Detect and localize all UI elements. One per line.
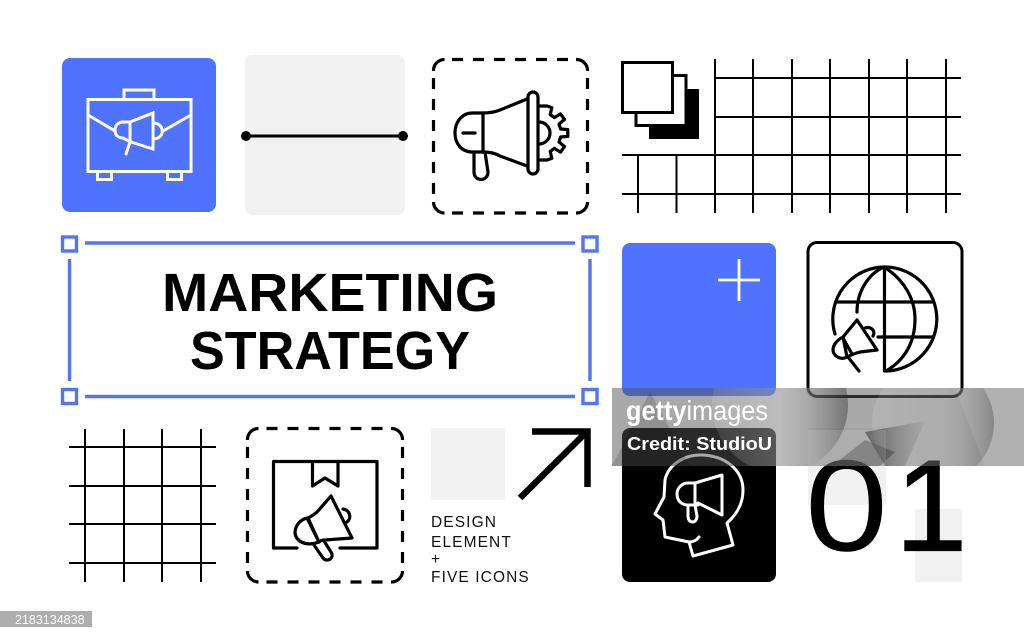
watermark band: gettyimages (626, 395, 768, 426)
gray panel with connector line (241, 55, 408, 215)
number 01 with gray swatches: 0 (805, 432, 888, 578)
caption (431, 514, 530, 586)
image id tag: 2183134838 (15, 613, 85, 627)
title frame with corner handles (62, 237, 597, 404)
number 01 with gray swatches (805, 428, 967, 582)
gray square swatch (431, 428, 505, 500)
arrow pointing up right (520, 432, 588, 498)
dashed tile: box with megaphone (247, 428, 403, 582)
caption: ELEMENT (431, 534, 512, 551)
dashed tile: megaphone with gear icon (433, 59, 588, 213)
outlined tile: globe with megaphone (808, 242, 962, 396)
watermark band (612, 388, 1024, 466)
title: STRATEGY (190, 321, 470, 381)
image id tag (0, 611, 92, 627)
grid pattern top right (622, 59, 961, 213)
caption: FIVE ICONS (431, 569, 530, 586)
caption: + (431, 551, 441, 568)
watermark band: Credit: StudioU (627, 433, 772, 454)
number 01 with gray swatches: 1 (895, 432, 967, 578)
icon tile: briefcase with megaphone (62, 58, 216, 212)
grid pattern bottom left (69, 429, 216, 582)
black tile: head with megaphone (622, 428, 776, 582)
caption: DESIGN (431, 514, 497, 531)
stacked squares (622, 62, 699, 139)
title: MARKETING (162, 263, 498, 323)
blue tile with plus (622, 243, 776, 396)
title (162, 263, 498, 381)
